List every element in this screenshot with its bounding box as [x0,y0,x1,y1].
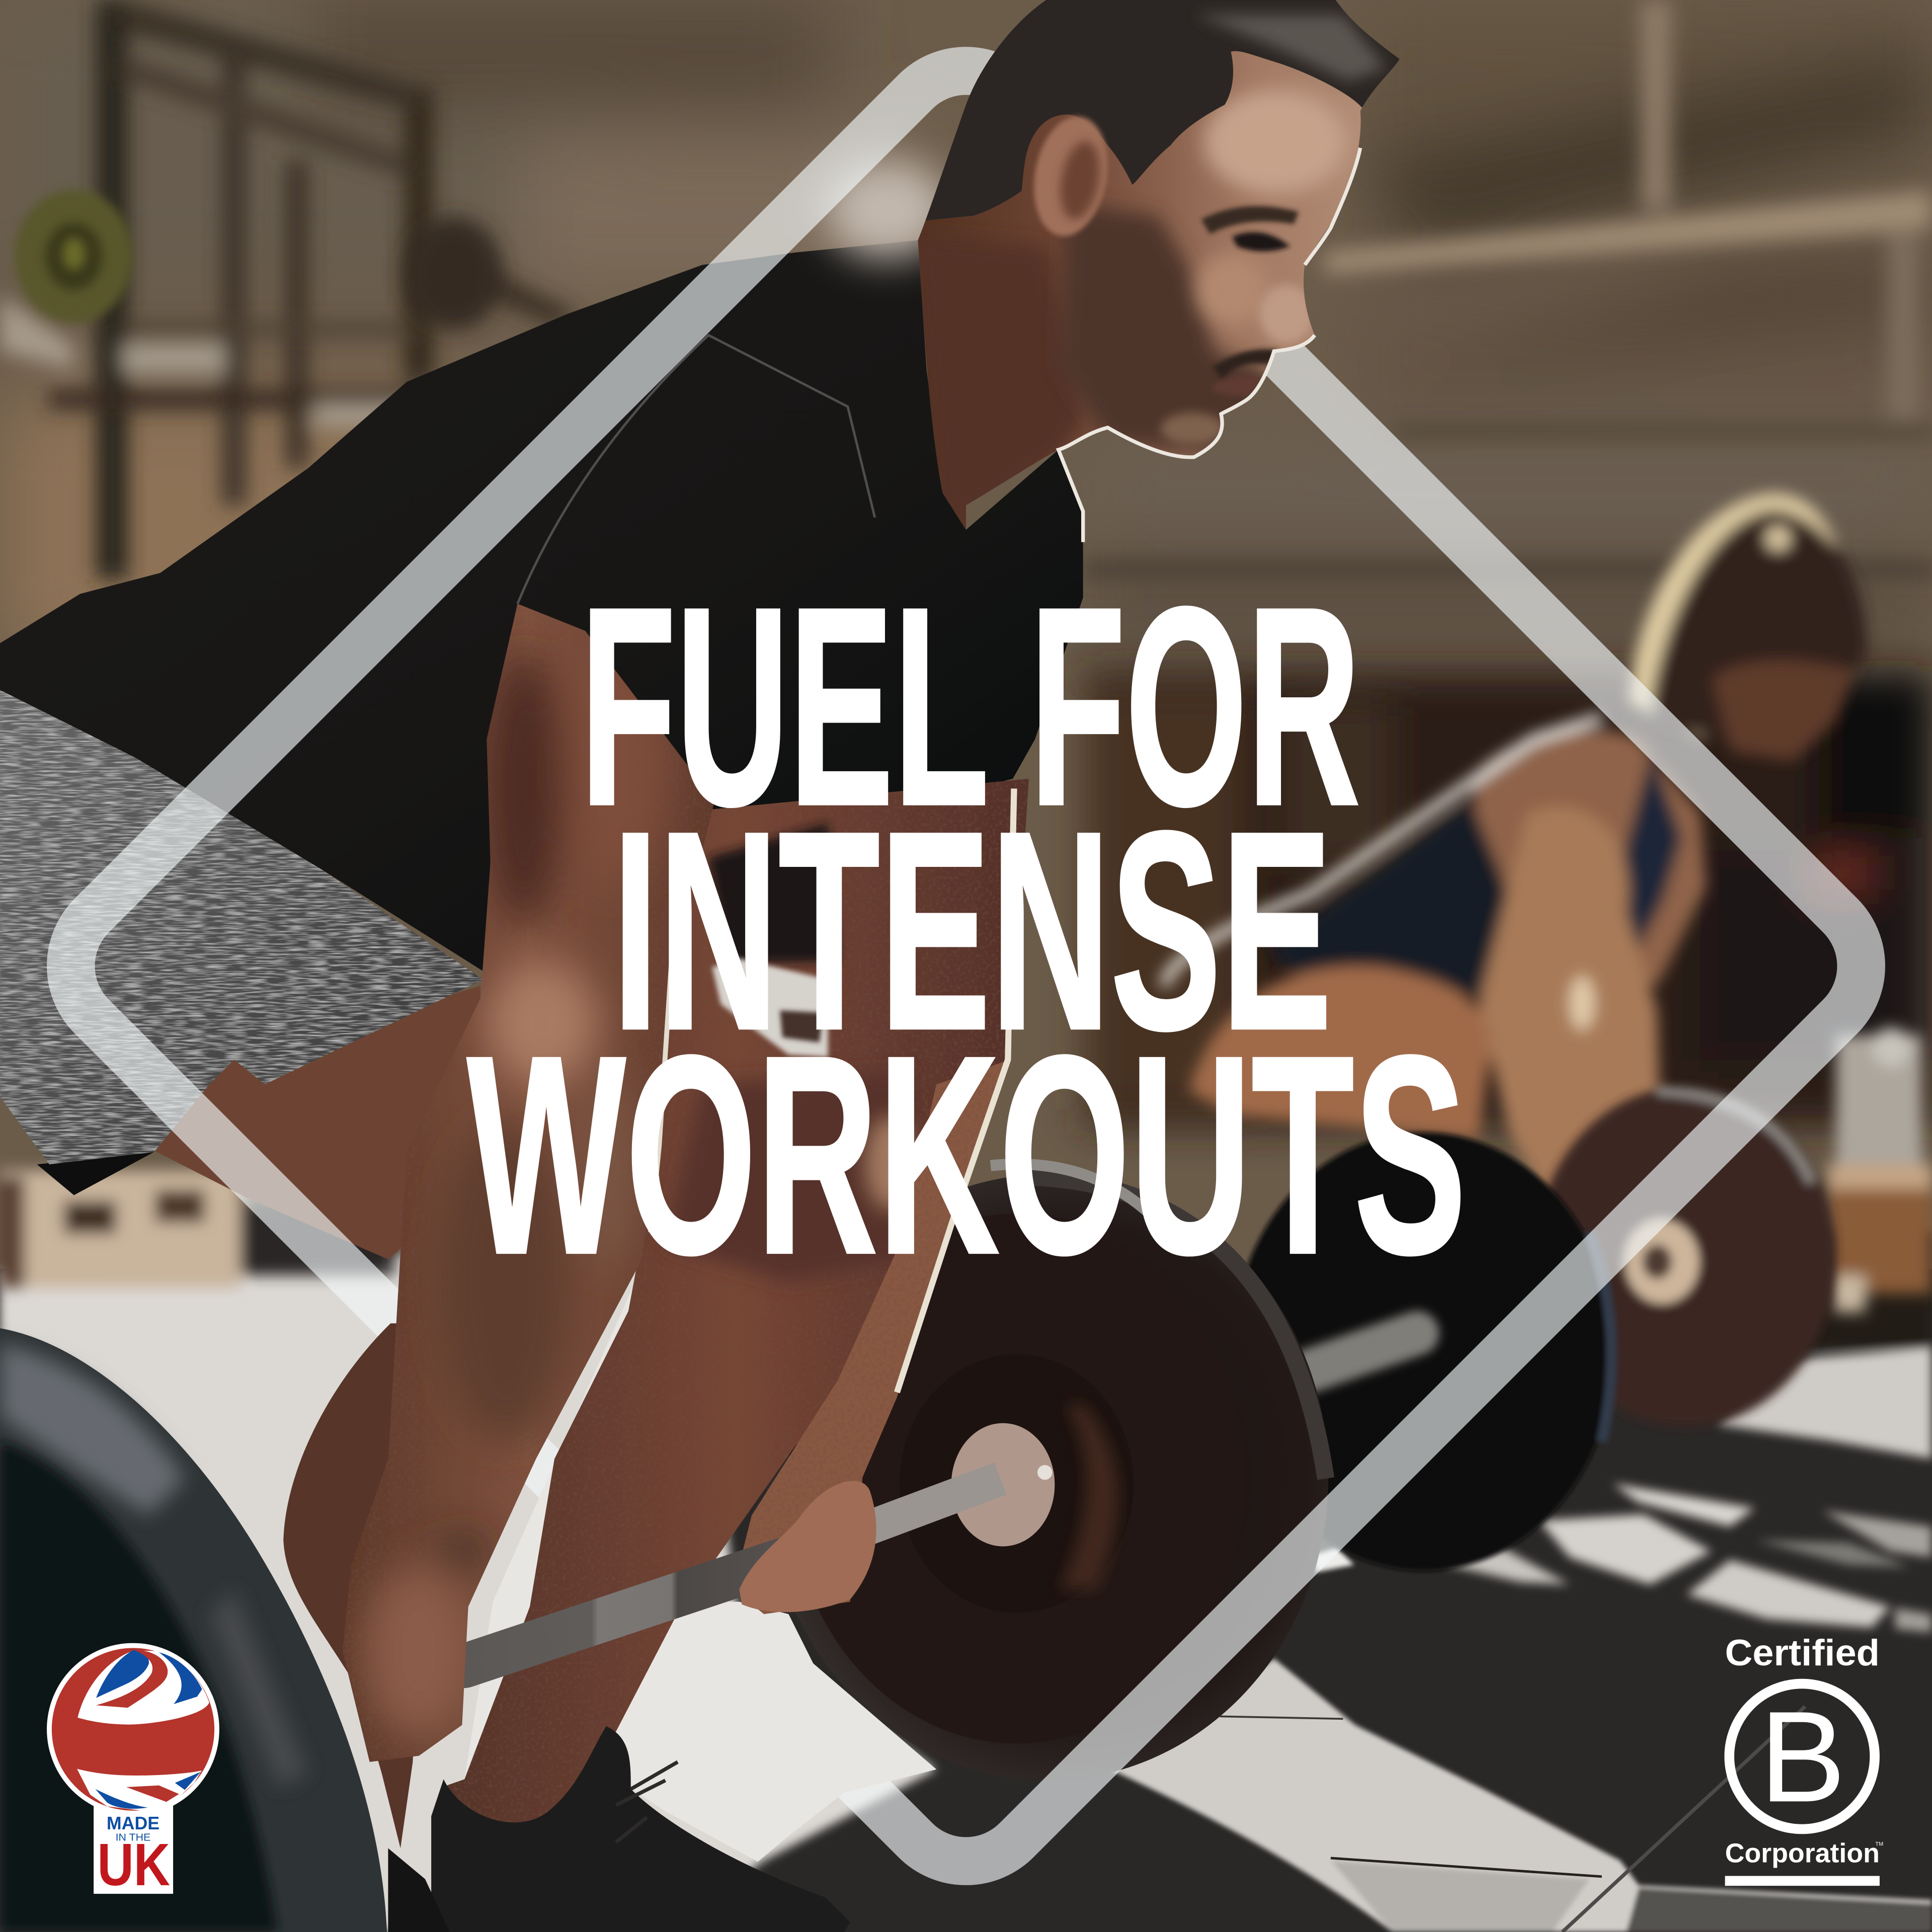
rim light on face [1059,148,1360,542]
shorts [0,690,483,1195]
wooden pallet [0,1171,394,1287]
badge: Certified B Corporation: B [1759,1684,1846,1829]
thigh and knee mass behind the title [444,779,1029,1836]
eye [1232,232,1290,252]
woman: face [1713,661,1855,761]
hair [912,0,1405,222]
rim light on right arm [897,788,1014,1392]
shirt [0,240,1083,974]
badge: Made in the UK: MADE [107,1813,159,1833]
woman: rim-lit hair [1629,493,1836,739]
floor [0,1232,1932,1932]
woman: rim light [1164,717,1602,986]
nose [1259,285,1314,344]
badge: Certified B Corporation: TM [1875,1841,1883,1847]
right forearm and central legs [283,779,1029,1848]
white strap [712,958,828,1057]
dark mid background [1084,672,1932,1128]
neck shadow [912,234,1084,530]
glow beside head [826,160,949,259]
beard [1060,203,1269,456]
bright floor masking the frame between the legs [464,1269,936,1862]
middle barbell plate [1232,1133,1614,1571]
overhead beam and post [1084,0,1932,578]
chin highlight [1161,413,1225,445]
woman: navy top [1269,801,1514,998]
moustache [1213,349,1279,379]
woman lifting in the background [1164,493,1867,1269]
badge: Certified B Corporation [1725,1632,1883,1886]
badge: Made in the UK [47,1643,219,1898]
badge: Certified B Corporation: Corporation [1725,1839,1880,1869]
forehead highlight [1204,90,1347,193]
right forearm [733,1060,1010,1614]
badge: Certified B Corporation: Certified [1725,1632,1880,1673]
dark buckle [780,1010,823,1042]
near arm: shading [363,640,665,1737]
title [467,548,1466,1312]
back thigh [109,986,480,1259]
brow [1201,206,1299,234]
barbell sleeve between plates [1311,1333,1417,1370]
woman: thigh [1189,967,1491,1140]
near barbell plate [766,1164,1328,1781]
dark gap under the shirt [708,823,838,963]
shaded thigh [665,1072,918,1281]
far barbell plate [1535,1087,1836,1427]
near arm [343,604,714,1762]
badge: Made in the UK: UK [97,1831,170,1898]
gym rack on the left [0,0,579,579]
ear [1025,111,1116,242]
dark weight plate [404,217,503,330]
thigh highlight [865,1116,914,1210]
cheek highlight [1195,253,1269,327]
right hand [739,1481,876,1612]
shirt: sleeve seam [518,335,875,604]
woman: shoulder and back [1473,730,1707,986]
badge: Made in the UK: IN THE [116,1831,150,1843]
front barbell plate [0,1328,387,1932]
title: INTENSE [612,773,1332,1088]
grey hair highlights [1195,15,1386,82]
mouth [1214,376,1264,397]
green weight plate [15,190,133,323]
woman: bright knuckles [1570,976,1594,1030]
crates and bottles far right [1828,1027,1932,1312]
light edge on forearm [651,961,672,1232]
woman: arm and hands [1479,807,1663,1269]
head [912,0,1405,542]
barbell [464,1479,1001,1666]
shoes [388,1726,850,1932]
back calf [283,1323,431,1848]
